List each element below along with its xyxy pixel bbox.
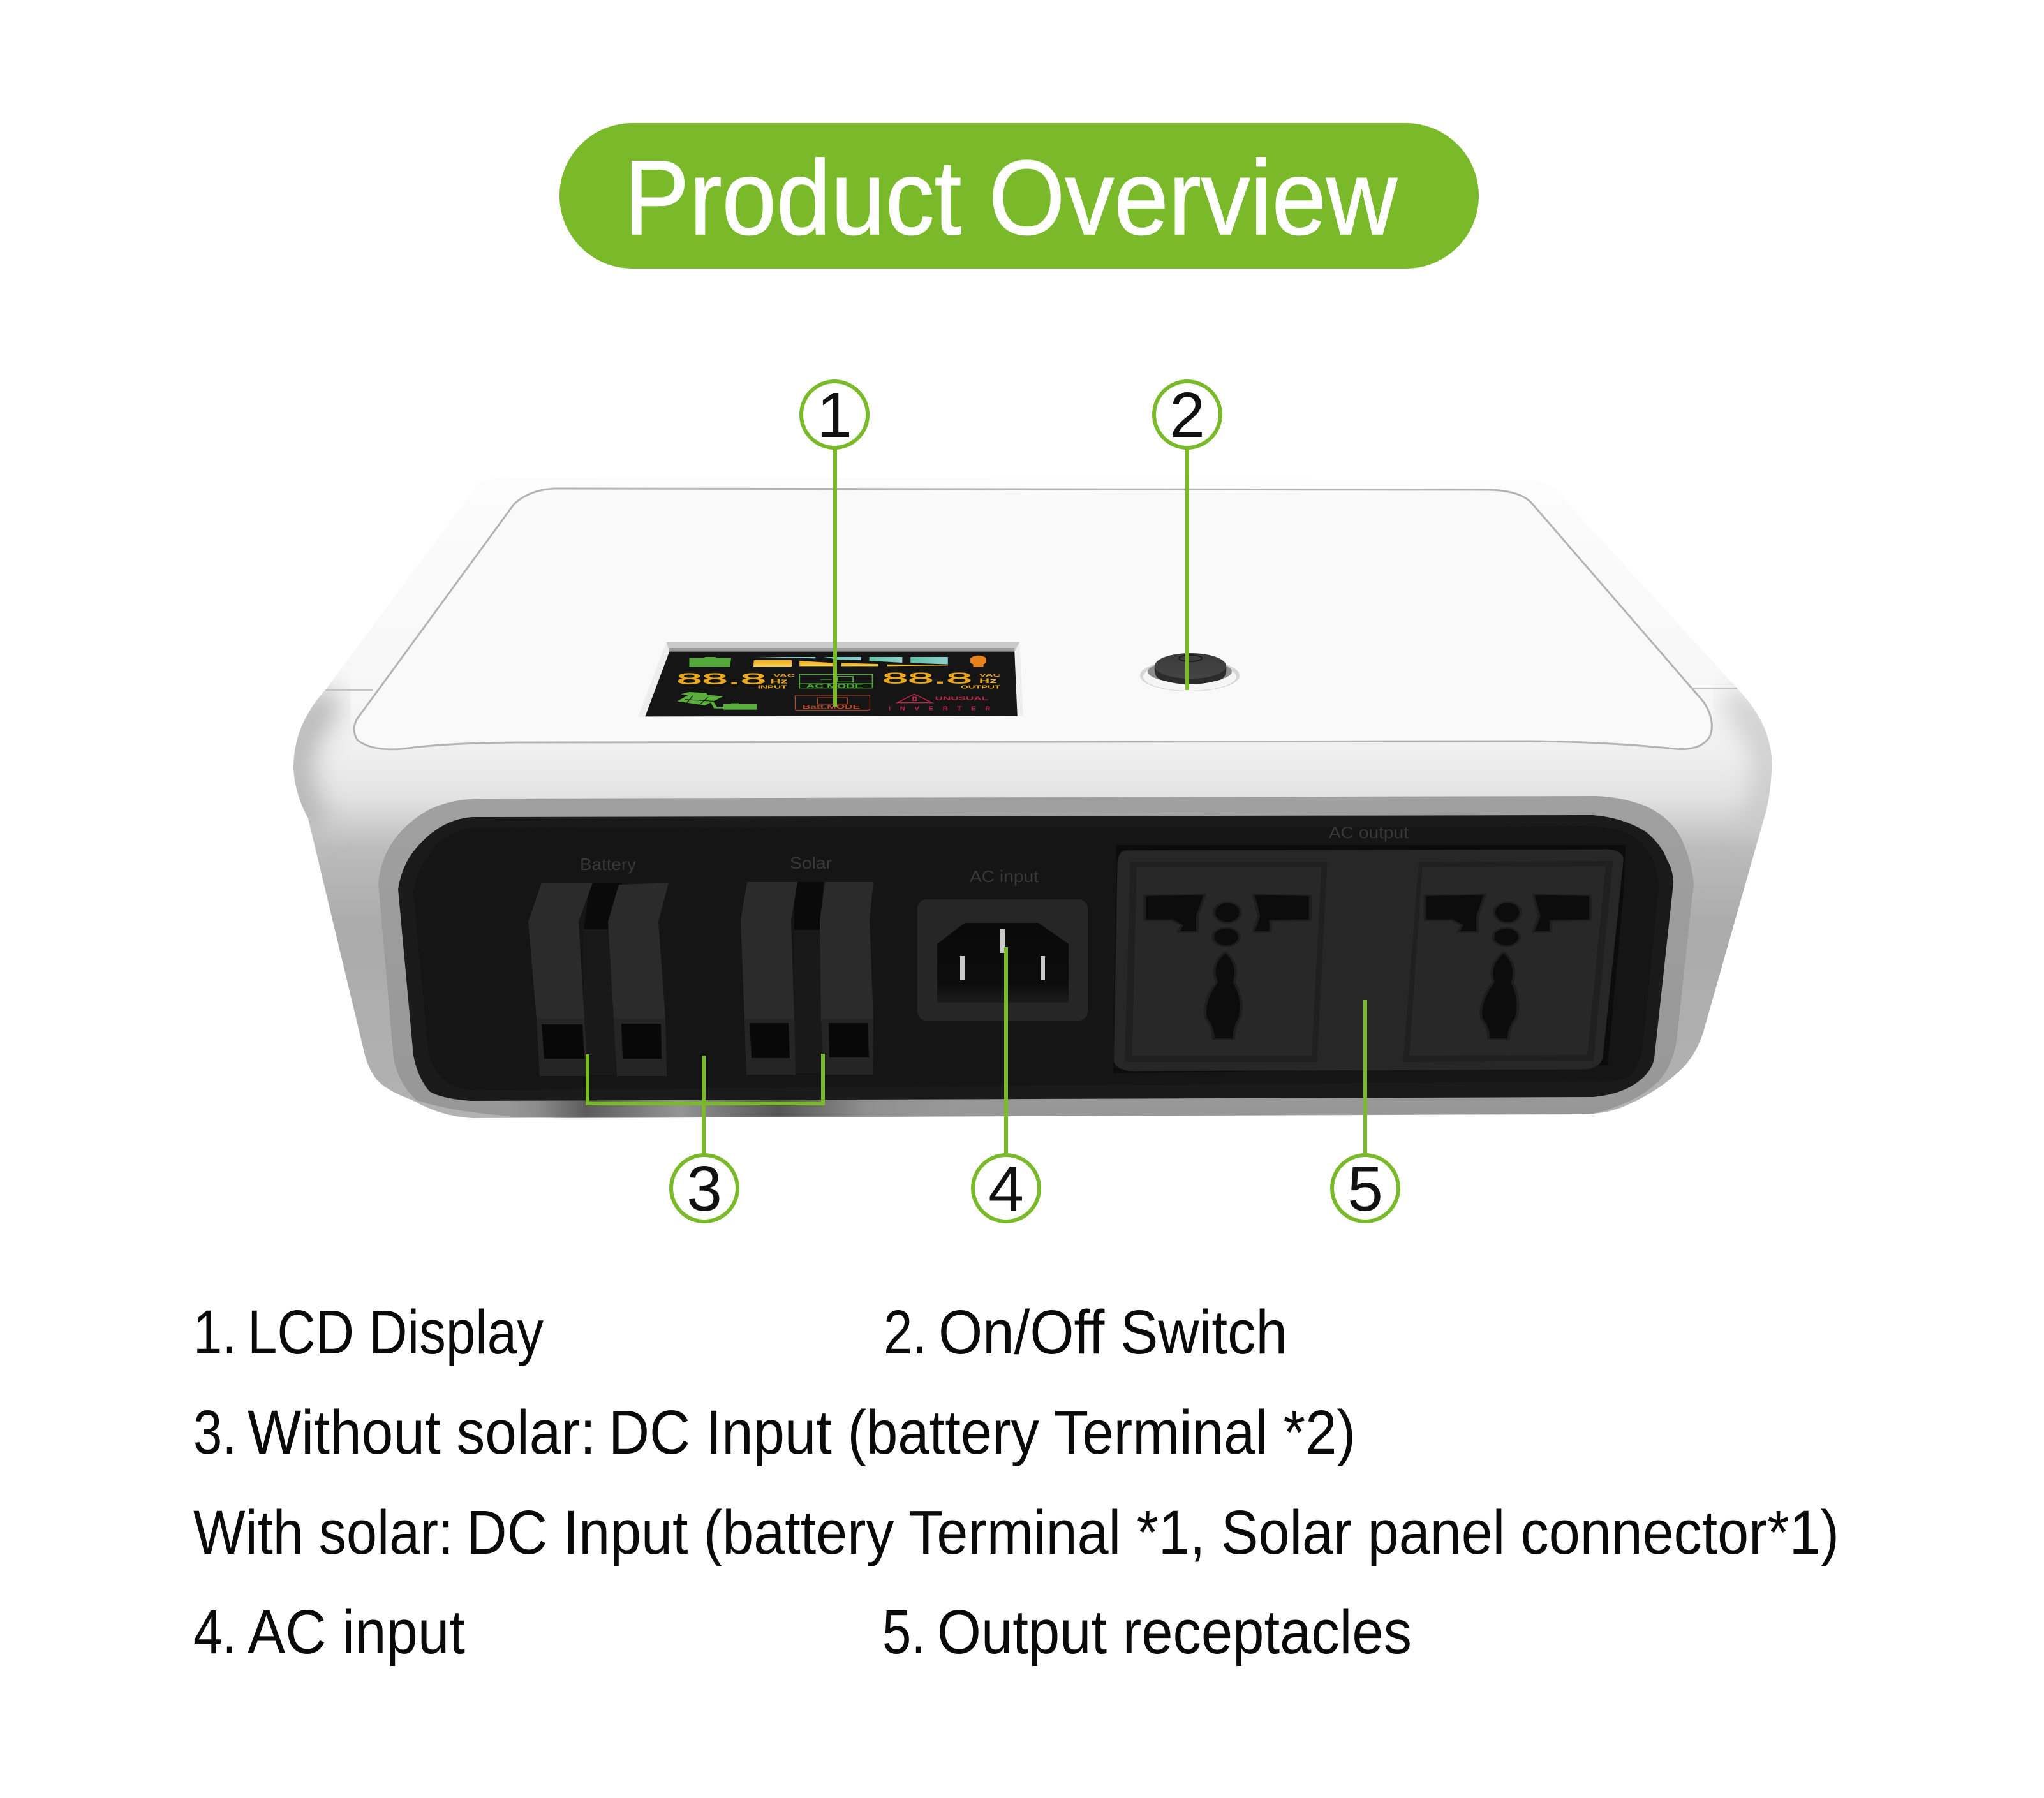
AC input inlet	[917, 867, 1088, 1021]
terminal group: battery	[528, 855, 669, 1076]
item 2: On/Off Switch	[938, 1297, 1287, 1367]
black front panel	[398, 815, 1673, 1101]
front bezel	[378, 796, 1694, 1118]
item 3 without solar: 3.	[193, 1397, 237, 1467]
item 3 without solar: Without solar:	[248, 1397, 596, 1467]
level bars	[753, 657, 948, 667]
callout 3: DC input bracket: 3	[686, 1153, 722, 1225]
load icon	[970, 656, 986, 667]
product: power inverter unit	[293, 478, 1772, 1118]
side seams	[325, 688, 1737, 690]
output units: Hz	[979, 677, 997, 685]
output readout: 88.8	[882, 670, 972, 688]
battery mode box	[796, 695, 870, 711]
device body	[293, 478, 1772, 1118]
callout 1: LCD display	[801, 379, 868, 707]
input units: INPUT	[758, 684, 787, 689]
output units	[961, 673, 1000, 689]
label: battery: Battery	[580, 855, 636, 874]
label: AC output: AC output	[1329, 823, 1409, 842]
solar icon	[677, 692, 757, 710]
terminal group: solar	[741, 853, 873, 1075]
item 2: 2.	[884, 1297, 927, 1367]
battery icon	[689, 657, 731, 667]
output units: VAC	[979, 673, 1000, 678]
AC mode box	[799, 674, 872, 689]
right socket	[1403, 861, 1613, 1062]
left socket	[1125, 862, 1327, 1062]
inverter label: INVERTER	[889, 706, 990, 712]
side edge shading	[295, 695, 1770, 829]
callout 4: AC input: 4	[988, 1153, 1024, 1225]
output units: OUTPUT	[961, 684, 1000, 689]
callout 1: LCD display: 1	[817, 379, 852, 451]
warning icon	[897, 694, 932, 703]
item 3 with solar: DC Input (battery Terminal *1, Solar panel connector*1)	[466, 1498, 1839, 1567]
callout 5: output receptacles: 5	[1347, 1153, 1383, 1225]
AC mode box: AC MODE	[806, 684, 863, 689]
item 1: LCD Display	[248, 1297, 544, 1367]
item 3 with solar: With solar:	[193, 1498, 454, 1567]
item 1: 1.	[193, 1297, 237, 1367]
item 5: Output receptacles	[937, 1597, 1412, 1667]
label: solar: Solar	[790, 853, 832, 873]
input units: Hz	[771, 677, 787, 685]
input units: VAC	[773, 674, 795, 678]
title text: Product Overview	[624, 139, 1398, 257]
callout 2: on/off switch	[1154, 379, 1220, 690]
item 5: 5.	[882, 1597, 926, 1667]
legend text block	[193, 1297, 1839, 1667]
title pill	[559, 123, 1479, 269]
top lid outline	[354, 489, 1712, 749]
AC output receptacles	[1113, 823, 1626, 1073]
callout 4: AC input	[973, 947, 1039, 1225]
LCD display	[638, 642, 1023, 716]
callout 3: DC input bracket	[588, 1054, 823, 1225]
callout 2: on/off switch: 2	[1169, 379, 1205, 451]
item 4: AC input	[248, 1597, 465, 1667]
unusual label: UNUSUAL	[935, 696, 989, 701]
input units	[758, 674, 795, 689]
callout 5: output receptacles	[1332, 1000, 1398, 1225]
power switch	[1140, 653, 1240, 691]
item 3 without solar	[193, 1397, 1356, 1467]
item 3 without solar: DC Input (battery Terminal *2)	[609, 1397, 1356, 1467]
bottom bezel shadow	[510, 1100, 957, 1117]
outlet housing	[1114, 850, 1624, 1071]
inner front panel	[413, 826, 1659, 1090]
battery mode box: Batt.MODE	[803, 704, 860, 711]
input readout: 88.8	[676, 671, 766, 688]
item 4: 4.	[193, 1597, 237, 1667]
label: AC input: AC input	[970, 867, 1039, 886]
